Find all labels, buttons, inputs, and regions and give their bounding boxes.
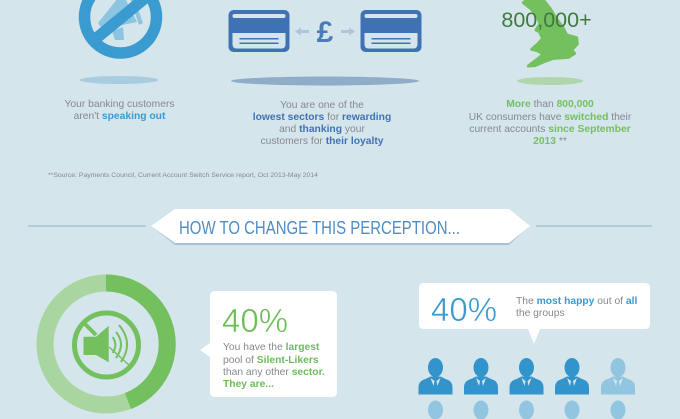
text: silent-likers: than any other — [223, 367, 292, 378]
stat: 40% green: 40% — [222, 302, 288, 339]
icon shadow — [80, 76, 158, 84]
text: lowest sectors: and — [279, 124, 299, 135]
icon: crossed-out megaphone — [84, 0, 156, 53]
text: most happy: The most happy out of all — [516, 296, 637, 307]
text: most happy: the groups — [516, 308, 565, 319]
text: silent-likers: Silent-Likers — [257, 355, 319, 366]
chart: donut 40% — [45, 283, 167, 405]
stat: 800,000+: 800,000+ — [501, 8, 592, 32]
text: switched accounts: UK consumers have — [469, 112, 564, 123]
panel: silent customers — [64, 0, 175, 122]
arrow: left — [295, 28, 309, 36]
text: lowest sectors: You are one of the — [280, 100, 364, 111]
text: switched accounts: 2013 — [533, 136, 556, 147]
text: lowest sectors: lowest sectors — [253, 112, 325, 123]
text: speaking out: Your banking customers — [64, 99, 175, 110]
panel: loyalty rewards — [228, 10, 422, 147]
text: lowest sectors: for rewarding — [327, 112, 391, 123]
text: switched accounts: ** — [556, 136, 567, 147]
text: switched accounts: current accounts — [469, 124, 548, 135]
heading banner — [151, 209, 530, 245]
callout: silent-likers — [200, 291, 337, 397]
text: lowest sectors: their loyalty — [326, 136, 384, 147]
text: lowest sectors: thanking your — [299, 124, 365, 135]
text: switched accounts: switched their — [564, 112, 631, 123]
text: speaking out: aren't — [74, 111, 102, 122]
icon shadow — [231, 76, 419, 86]
divider — [28, 225, 652, 227]
icon shadow — [517, 77, 583, 85]
icon: UK map — [523, 0, 577, 66]
text: silent-likers: pool of — [223, 355, 257, 366]
text: switched accounts: More than 800,000 — [506, 99, 594, 110]
heading text: HOW TO CHANGE THIS PERCEPTION... — [179, 218, 460, 238]
pictogram: people row two — [428, 400, 626, 419]
icon: left card — [228, 10, 290, 52]
pictogram: people row one — [418, 358, 635, 394]
icon: pound sign: £ — [317, 16, 334, 49]
text: silent-likers: You have the largest — [223, 342, 319, 353]
icon: muted speaker — [74, 313, 138, 377]
text: speaking out: speaking out — [102, 111, 166, 122]
text: switched accounts: since September — [548, 124, 631, 135]
arrow: right — [341, 28, 355, 36]
stat: 40% blue: 40% — [431, 291, 497, 328]
text: silent-likers: sector. — [292, 367, 325, 378]
text: lowest sectors: customers for — [260, 136, 326, 147]
source note: **Source: Payments Council, Current Account Switch Service report, Oct 2013-May 2014 — [48, 173, 319, 179]
text: silent-likers: They are... — [223, 379, 274, 390]
icon: right card — [360, 10, 422, 52]
panel: switched accounts — [469, 0, 632, 147]
callout: most happy — [419, 283, 650, 344]
